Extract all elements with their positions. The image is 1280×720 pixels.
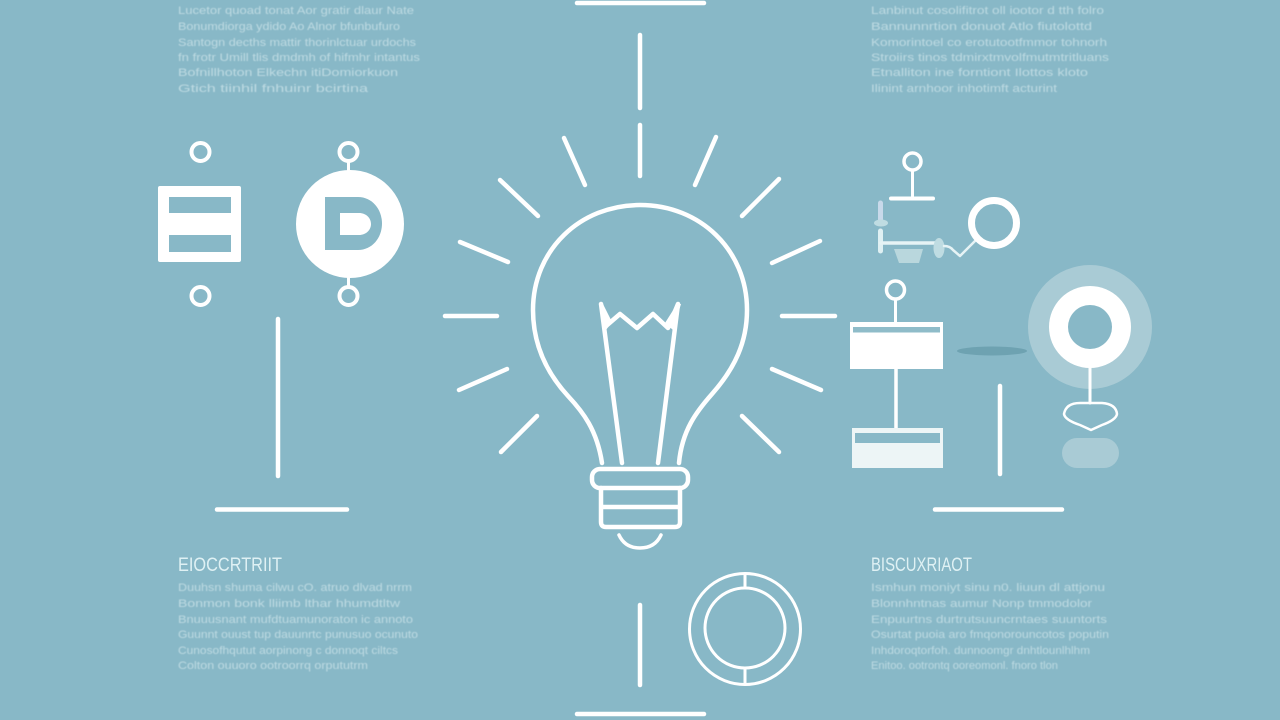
icon: light bulb <box>533 205 747 548</box>
icon: target ring with halo <box>1028 265 1152 468</box>
body: bottom right: Blonnhntnas aumur Nonp tmmodolor <box>871 598 1092 610</box>
heading: bottom right: BISCUXRIAOT <box>871 555 972 576</box>
body: bottom left: Duuhsn shuma cilwu cO. atruo dlvad nrrm <box>178 582 412 594</box>
bulb tip <box>619 535 661 548</box>
body: bottom left: Guunnt ouust tup dauunrtc punusuo ocunuto <box>178 629 418 641</box>
icon: circuit cluster top right <box>874 153 1016 263</box>
text block: top left <box>178 5 421 95</box>
body: bottom right: Enpuurtns durtrutsuuncrntaes suuntorts <box>871 614 1108 626</box>
text block: bottom right <box>871 555 1109 672</box>
text block: top left: Bonumdiorga ydido Ao Alnor bfunbufuro <box>178 21 400 33</box>
text block: top right: Bannunnrtion donuot Atlo fiutolottd <box>871 21 1092 33</box>
connector: top bar <box>577 1 704 5</box>
connector: top vertical <box>638 35 642 108</box>
text block: top right: Stroiirs tinos tdmirxtmvolfmutmtritluans <box>871 52 1110 64</box>
text block: top right: Komorintoel co erotutootfmmor tohnorh <box>871 37 1107 49</box>
heading: bottom left: EIOCCRTRIIT <box>178 555 282 576</box>
connector: left horizontal <box>217 507 347 512</box>
filament <box>601 304 678 463</box>
icon: light rays <box>445 125 835 452</box>
body: bottom right <box>871 582 1109 672</box>
text block: top right: Lanbinut cosolifitrot oll iootor d tth folro <box>871 5 1104 17</box>
collar <box>592 469 688 488</box>
body: bottom left: Cunosofhqutut aorpinong c donnoqt ciltcs <box>178 645 399 657</box>
icon: stacked boxes <box>850 281 943 468</box>
text block: top right <box>871 5 1110 95</box>
screw base <box>601 488 680 527</box>
connector: bottom vertical <box>638 605 642 685</box>
icon: double ring <box>690 574 800 684</box>
body: bottom right: Enitoo. ootrontq ooreomonl. fnoro tlon <box>871 660 1058 672</box>
text block: top left: Santogn decths mattir thorinlctuar urdochs <box>178 37 417 49</box>
body: bottom right: Inhdoroqtorfoh. dunnoomgr dnhtlounlhlhm <box>871 645 1090 657</box>
body: bottom right: Ismhun moniyt sinu n0. liuun dl attjonu <box>871 582 1105 594</box>
body: bottom left: Bnuuusnant mufdtuamunoraton ic annoto <box>178 614 413 626</box>
text block: top left: Gtich tiinhil fnhuinr bcirtina <box>178 83 369 95</box>
body: bottom right: Osurtat puoia aro fmqonorouncotos poputin <box>871 629 1109 641</box>
filament tips <box>599 304 681 330</box>
bulb glass <box>533 205 747 463</box>
body: bottom left: Bonmon bonk lliimb lthar hhumdtltw <box>178 598 400 610</box>
connector: left vertical <box>276 319 280 476</box>
text block: top left: Bofnillhoton Elkechn itiDomiorkuon <box>178 67 398 79</box>
connector: right vertical <box>998 386 1002 474</box>
connector: bottom bar <box>577 712 704 716</box>
text block: top left: fn frotr Umill tlis dmdmh of hifmhr intantus <box>178 52 421 64</box>
icon: left box with dots <box>158 143 241 305</box>
dark pill shadow <box>957 346 1027 356</box>
text block: top right: Etnalliton ine forntiont Ilottos kloto <box>871 67 1088 79</box>
text block: top left: Lucetor quoad tonat Aor gratir dlaur Nate <box>178 5 414 17</box>
body: bottom left <box>178 582 418 672</box>
text block: top right: Ilinint arnhoor inhotimft acturint <box>871 83 1057 95</box>
body: bottom left: Colton ouuoro ootroorrq orpututrm <box>178 660 368 672</box>
icon: D badge <box>296 143 404 305</box>
text block: bottom left <box>178 555 418 672</box>
connector: right horizontal <box>935 507 1062 512</box>
